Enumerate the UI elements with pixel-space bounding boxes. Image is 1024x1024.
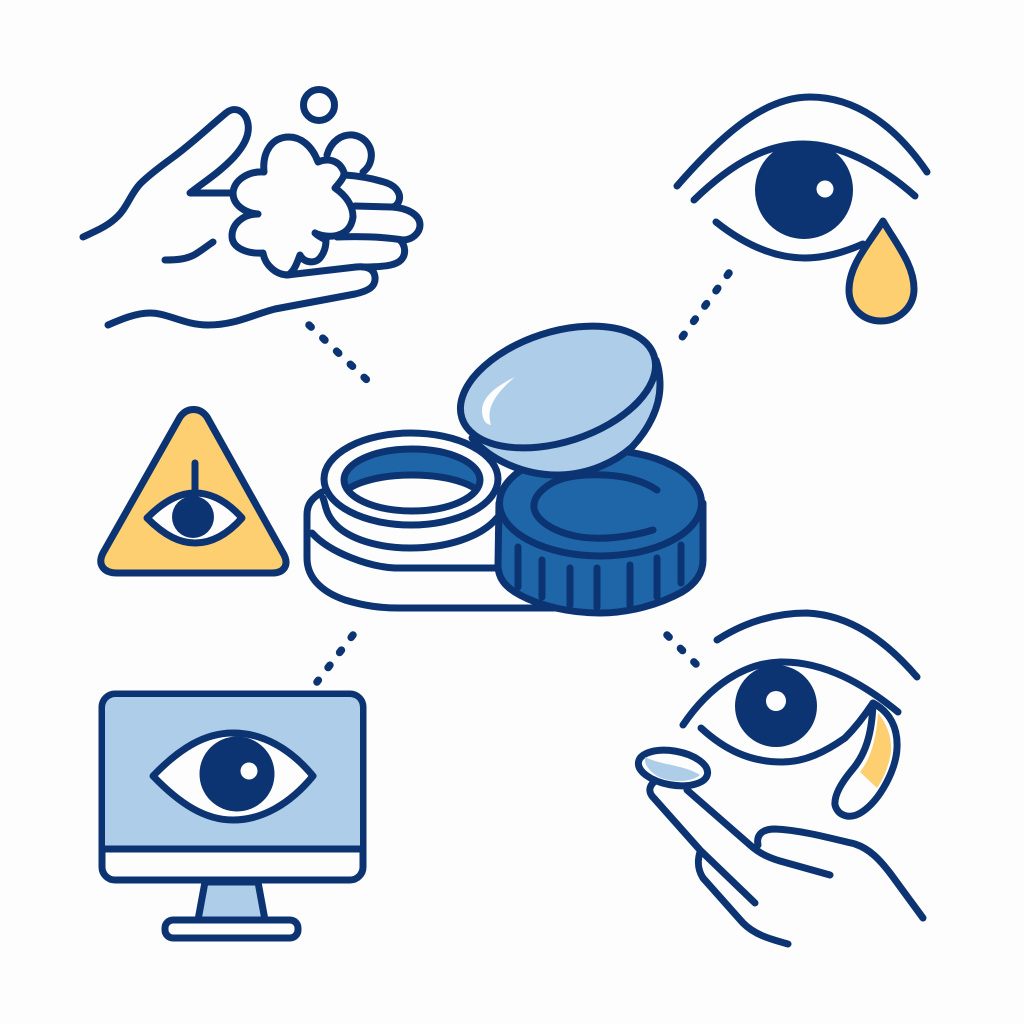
lids [683, 662, 898, 725]
contact lens dome [472, 360, 660, 475]
icon: warning triangle with eye [101, 410, 286, 573]
iris [755, 141, 853, 239]
icon: soap foam cloud [232, 137, 353, 275]
cap inner groove [534, 475, 657, 538]
dotted connector: monitor to case [317, 635, 353, 682]
finger and hand [650, 783, 755, 903]
icon: watery eye [677, 97, 927, 321]
monitor body [102, 694, 363, 880]
brow [717, 613, 917, 677]
monitor stand [198, 882, 265, 920]
well opening [344, 449, 480, 511]
icon: washing hands with soap [83, 90, 420, 325]
icon: large bubble [327, 135, 371, 172]
infographic illustration [80, 86, 930, 948]
tear yellow fill [860, 713, 891, 788]
lens on fingertip [636, 745, 710, 791]
case base [307, 492, 565, 608]
lens highlight [482, 377, 515, 425]
icon: eye with tear and lens on finger [636, 613, 923, 944]
contact lens case [307, 303, 703, 613]
yellow tear drop [849, 221, 914, 321]
dotted connector: hands to case [309, 325, 368, 381]
top ring [324, 433, 498, 525]
screen eye [153, 733, 313, 820]
contact lens rim [445, 303, 671, 471]
cap ridges [518, 545, 681, 607]
cap top [500, 450, 702, 556]
second ring [323, 498, 497, 548]
monitor screen [105, 697, 360, 849]
icon: small bubble [304, 90, 334, 120]
icon: computer monitor with eye [102, 694, 363, 938]
iris [735, 665, 817, 747]
dotted connector: watery eye to case [680, 273, 729, 340]
monitor base [165, 920, 298, 938]
dotted connector: application to case [667, 635, 697, 665]
blue cap side [498, 503, 703, 613]
tear [835, 703, 897, 816]
